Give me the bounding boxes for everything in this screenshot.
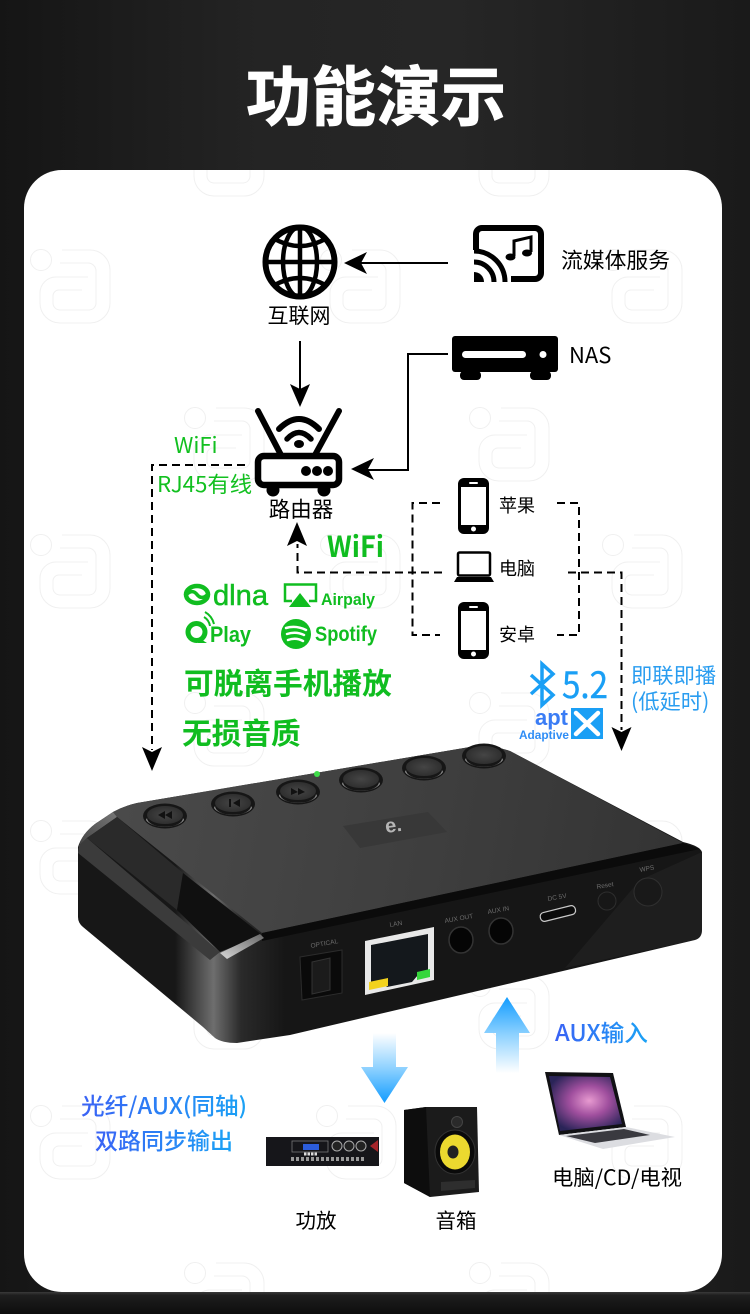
- control buttons: [143, 744, 506, 828]
- icon: phone Apple: [458, 478, 489, 534]
- icon: phone Android: [458, 602, 489, 659]
- arrow: dashed devices to unit via Bluetooth: [568, 572, 632, 751]
- device top surface: [113, 746, 683, 933]
- icon: Bluetooth 5.2: [531, 657, 608, 709]
- reset and WPS buttons: [598, 878, 662, 910]
- port labels: WPS: [639, 864, 656, 874]
- port labels: AUX IN: [487, 905, 510, 916]
- title: 功能演示: [246, 45, 506, 139]
- arrow: blue down output: [361, 1033, 408, 1103]
- text: optical and AUX dual output: [81, 1087, 247, 1156]
- label: speaker: 音箱: [436, 1204, 476, 1234]
- dashed bracket right: [557, 503, 579, 635]
- label: Android: 安卓: [499, 621, 535, 647]
- label: streaming service: 流媒体服务: [561, 244, 670, 275]
- arrow: blue up input: [484, 997, 530, 1073]
- label: router: 路由器: [269, 493, 333, 524]
- port labels: LAN: [389, 920, 403, 929]
- icon: speaker: [404, 1107, 479, 1197]
- icon: Bluetooth 5.2: 5.2: [562, 657, 608, 709]
- arrow: NAS to router: [351, 354, 448, 480]
- logo: Spotify: Spotify: [315, 623, 377, 646]
- label: computer: 电脑: [499, 555, 535, 581]
- label: RJ45 wired: RJ45有线: [157, 468, 252, 499]
- panel: white content card: [24, 170, 722, 1292]
- label: WiFi bold: WiFi: [327, 524, 384, 566]
- port labels: DC 5V: [547, 893, 568, 903]
- optical port: [300, 950, 342, 1000]
- text: instant playback low latency: (低延时): [631, 685, 709, 716]
- icon: NAS box: [452, 336, 558, 380]
- port labels: OPTICAL: [310, 938, 339, 950]
- port labels: Reset: [596, 881, 614, 891]
- icon: globe with label: 互联网: [268, 300, 330, 330]
- logo: aptX Adaptive: [519, 705, 603, 742]
- icon: laptop: [454, 552, 494, 582]
- text: lossless audio: 无损音质: [182, 710, 301, 753]
- text: instant playback low latency: 即联即播: [631, 659, 716, 690]
- label: Apple: 苹果: [499, 492, 535, 518]
- audio jacks: [449, 918, 513, 953]
- port labels: AUX OUT: [444, 913, 474, 925]
- icon: streaming cast: [474, 228, 541, 282]
- status LED: [314, 771, 320, 777]
- LAN port: [365, 927, 434, 995]
- arrow: dashed devices to router via WiFi: [287, 522, 442, 572]
- logo: Spotify: [281, 619, 377, 649]
- label: NAS: NAS: [569, 338, 611, 370]
- device body silhouette: [78, 746, 702, 1043]
- port labels: [310, 864, 656, 950]
- label: amplifier: 功放: [296, 1204, 336, 1234]
- logo patch: [343, 812, 447, 848]
- logo: dlna: dlna: [213, 580, 269, 612]
- logo patch: e.: [384, 814, 403, 838]
- label: AUX input: AUX输入: [555, 1014, 648, 1048]
- icon: router: [258, 411, 339, 496]
- logo: aptX Adaptive: Adaptive: [519, 728, 569, 742]
- text: playback without phone: 可脱离手机播放: [184, 660, 392, 703]
- label: WiFi green: WiFi: [174, 428, 218, 460]
- text: optical and AUX dual output: 双路同步输出: [95, 1122, 233, 1156]
- logo: Airplay: Airpaly: [321, 590, 376, 609]
- logo: dlna: [185, 580, 269, 612]
- logo: QPlay: Play: [210, 622, 252, 647]
- logo: Airplay: [285, 584, 376, 609]
- label: computer CD TV: 电脑/CD/电视: [552, 1162, 682, 1192]
- text: optical and AUX dual output: 光纤/AUX(同轴): [81, 1087, 247, 1121]
- device bevel: [79, 812, 117, 846]
- arrow: dashed router to device: [142, 465, 245, 771]
- micro USB port: [539, 905, 576, 922]
- dashed bracket left: [412, 503, 440, 635]
- arrow: streaming to internet: [344, 252, 448, 274]
- text: instant playback low latency: [631, 659, 716, 716]
- icon: globe with label: [265, 227, 335, 330]
- arrow: internet to router: [290, 341, 310, 407]
- logo: aptX Adaptive: apt: [535, 705, 569, 730]
- icon: amplifier: [266, 1137, 379, 1166]
- logo: QPlay: [188, 612, 252, 647]
- icon: laptop with screen: [545, 1072, 675, 1149]
- device: black streaming unit: [78, 744, 702, 1043]
